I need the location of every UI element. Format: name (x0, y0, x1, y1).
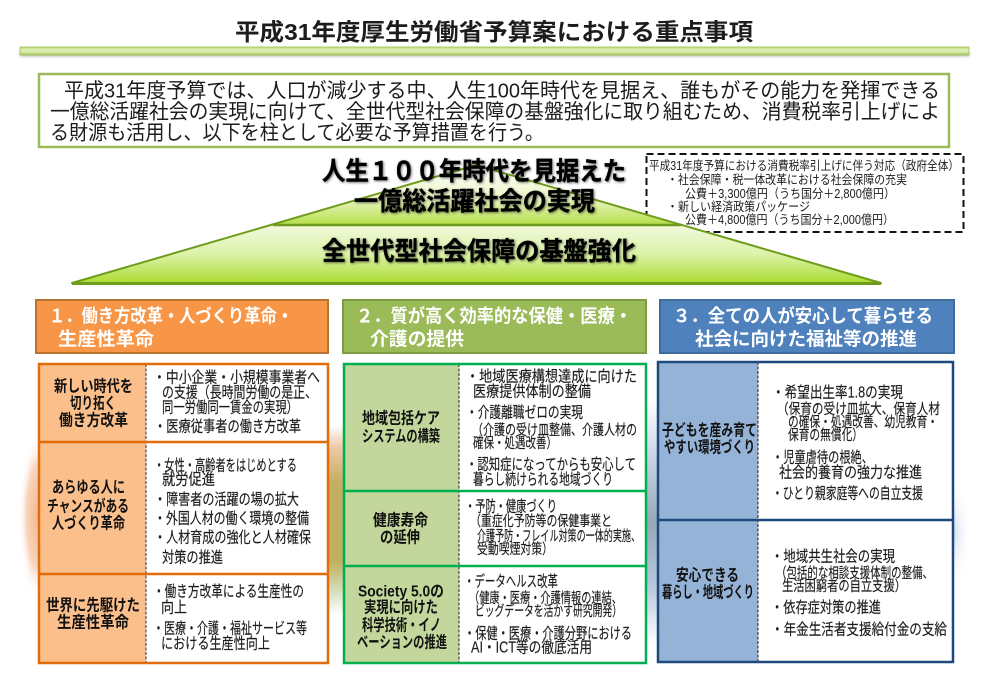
row: 子ども: ・ひとり親家庭等への自立支援 (772, 484, 923, 502)
row: 働き方改革: 同一労働同一賃金の実現） (162, 398, 298, 416)
panel 3 header (660, 300, 954, 353)
row: 人づくり革命: ・外国人材の働く環境の整備 (154, 510, 309, 528)
pyramid heading: top (322, 158, 626, 216)
panel 3 header: 社会に向けた福祉等の推進 (695, 328, 917, 350)
row: Society 5.0: （健康・医療・介護情報の連結、 (469, 590, 622, 607)
row: 生産性革命: における生産性向上 (161, 634, 270, 652)
dashed budget note: ・新しい経済政策パッケージ (667, 199, 810, 214)
panel 3 table (658, 362, 953, 662)
row: Society 5.0: AI・ICT等の徹底活用 (471, 638, 592, 656)
title: 平成31年度厚生労働省予算案における重点事項 (235, 19, 754, 45)
intro text box: 平成31年度予算では、人口が減少する中、人生100年時代を見据え、誰もがその能力を発揮できる (64, 80, 940, 102)
row: 安心: 生活困窮者の自立支援） (782, 578, 906, 595)
title underline bar (20, 47, 969, 56)
dashed budget note: 公費＋3,300億円（うち国分＋2,800億円） (685, 186, 895, 201)
intro text box (39, 74, 949, 147)
row: 安心: ・地域共生社会の実現 (771, 548, 895, 566)
panel 2 header (343, 300, 646, 353)
row: 子ども: の確保・処遇改善、幼児教育・ (788, 414, 938, 431)
row: 健康寿命: 受動喫煙対策） (477, 541, 553, 558)
row: 地域包括ケア: ・地域医療構想達成に向けた (466, 368, 637, 386)
row: Society 5.0: 実現に向けた (364, 598, 438, 616)
row: 生産性革命: 生産性革命 (57, 612, 129, 632)
row: 人づくり革命: ・女性・高齢者をはじめとする (154, 456, 297, 474)
row: 地域包括ケア: （介護の受け皿整備、介護人材の (472, 422, 637, 439)
intro text box: 一億総活躍社会の実現に向けて、全世代型社会保障の基盤強化に取り組むため、消費税率引上げによ (50, 100, 940, 124)
row: 働き方改革: 働き方改革 (59, 410, 128, 430)
row: 地域包括ケア: ・認知症になってからも安心して (466, 456, 636, 474)
row: 働き方改革: ・中小企業・小規模事業者へ (153, 368, 320, 386)
row: 安心: 暮らし・地域づくり (662, 582, 754, 602)
row: 子ども: 社会的養育の強力な推進 (779, 464, 922, 482)
dashed budget note: ・社会保障・税一体改革における社会保障の充実 (667, 172, 907, 187)
pyramid heading: top: 一億総活躍社会の実現 (354, 188, 595, 216)
row: Society 5.0: Society 5.0の (358, 584, 444, 600)
row: 安心: （包括的な相談支援体制の整備、 (776, 565, 933, 582)
row: 生産性革命 (46, 582, 307, 652)
row: 地域包括ケア: システムの構築 (362, 426, 440, 446)
row: 安心: 安心できる (676, 566, 739, 584)
row: Society 5.0: ・保健・医療・介護分野における (464, 624, 632, 642)
panel 2 (343, 300, 646, 663)
row: Society 5.0: ・データヘルス改革 (464, 572, 558, 590)
intro text box: る財源も活用し、以下を柱として必要な予算措置を行う。 (50, 122, 544, 144)
row: 子ども: 保育の無償化） (788, 427, 863, 444)
panel 1 header: 生産性革命 (58, 328, 155, 350)
row: 安心: ・年金生活者支援給付金の支給 (771, 620, 947, 638)
row: 子ども: ・希望出生率1.8の実現 (772, 384, 903, 402)
row: 健康寿命: 健康寿命 (373, 510, 428, 530)
row: 働き方改革: 切り拓く (70, 394, 116, 412)
row: 健康寿命: の延伸 (380, 528, 420, 546)
row: 子ども: （保育の受け皿拡大、保育人材 (777, 401, 940, 418)
row: 地域包括ケア: 医療提供体制の整備 (473, 382, 591, 400)
row: 人づくり革命 (47, 456, 311, 566)
panel 1 header (36, 300, 328, 353)
row: Society 5.0: 科学技術・イノ (362, 616, 441, 634)
panel 1 table (39, 364, 328, 663)
row: 地域包括ケア: 確保・処遇改善） (473, 435, 557, 452)
row: 人づくり革命: 人づくり革命 (52, 514, 125, 532)
row: 働き方改革: ・医療従事者の働き方改革 (154, 418, 301, 436)
dashed budget note: 公費＋4,800億円（うち国分＋2,000億円） (685, 212, 894, 227)
row: 人づくり革命: ・人材育成の強化と人材確保 (154, 528, 311, 546)
row: Society 5.0: ビッグデータを活かす研究開発） (475, 602, 622, 620)
row: 生産性革命: 世界に先駆けた (46, 596, 140, 614)
row: 人づくり革命: 就労促進 (162, 470, 215, 488)
panel 2 header: ２．質が高く効率的な保健・医療・ (356, 306, 632, 326)
row: 地域包括ケア (362, 368, 637, 488)
row: 生産性革命: ・医療・介護・福祉サービス等 (153, 620, 307, 638)
pyramid (72, 165, 881, 284)
panel 2 header: 介護の提供 (370, 328, 464, 350)
row: 働き方改革: 新しい時代を (54, 378, 133, 396)
row: 健康寿命 (373, 498, 640, 558)
row: 地域包括ケア: ・介護離職ゼロの実現 (466, 404, 583, 422)
panel 3 (658, 300, 954, 662)
row: Society 5.0: ベーションの推進 (357, 634, 447, 652)
background glows (19, 400, 971, 645)
row: 地域包括ケア: 地域包括ケア (362, 408, 440, 428)
panel 1 header: １．働き方改革・人づくり革命・ (49, 306, 293, 326)
row: 安心 (662, 548, 947, 638)
pyramid heading: top: 人生１００年時代を見据えた (322, 158, 626, 186)
row: 人づくり革命: あらゆる人に (52, 478, 125, 496)
row: 人づくり革命: ・障害者の活躍の場の拡大 (154, 490, 299, 508)
row: 人づくり革命: チャンスがある (47, 496, 129, 516)
row: 子ども (662, 384, 940, 502)
row: 働き方改革: の支援（長時間労働の是正、 (162, 384, 317, 402)
row: 生産性革命: ・働き方改革による生産性の (153, 582, 304, 600)
row: 健康寿命: （重症化予防等の保健事業と (470, 512, 612, 530)
row: Society 5.0 (357, 572, 632, 656)
row: 安心: ・依存症対策の推進 (771, 598, 881, 616)
row: 子ども: やすい環境づくり (664, 438, 755, 456)
row: 子ども: 子どもを産み育て (662, 420, 757, 440)
dashed budget note (646, 154, 964, 232)
panel 2 table (344, 364, 646, 663)
row: 人づくり革命: 対策の推進 (162, 548, 223, 566)
row: 生産性革命: 向上 (161, 598, 187, 616)
panel 3 header: ３．全ての人が安心して暮らせる (673, 306, 933, 326)
row: 健康寿命: 介護予防・フレイル対策の一体的実施、 (477, 528, 640, 545)
row: 働き方改革 (54, 368, 320, 436)
panel 1 (36, 300, 328, 663)
row: 子ども: ・児童虐待の根絶、 (772, 448, 873, 466)
row: 健康寿命: ・予防・健康づくり (465, 498, 557, 516)
row: 地域包括ケア: 暮らし続けられる地域づくり (473, 470, 613, 488)
pyramid heading: base: 全世代型社会保障の基盤強化 (322, 238, 636, 266)
